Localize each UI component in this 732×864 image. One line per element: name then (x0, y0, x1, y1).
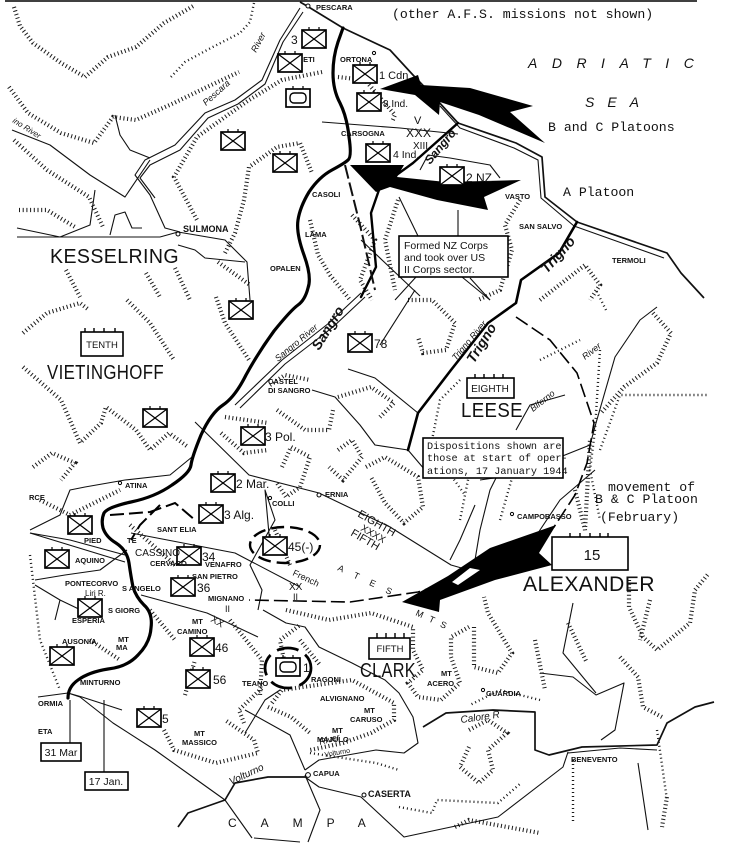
callout: dispositions: those at start of oper- (427, 453, 568, 465)
place names: TERMOLI (612, 256, 646, 265)
place names: GUARDIA (486, 689, 522, 698)
place names: CASOLI (312, 190, 340, 199)
river and mountain range labels: Trigno (537, 233, 578, 276)
unit: 3 Pol: 3 Pol. (265, 430, 296, 444)
corps boundary symbols: XIII (413, 141, 428, 152)
army box: Tenth (81, 328, 123, 356)
unit: 56: 56 (213, 673, 227, 687)
army box: Fifth: FIFTH (377, 644, 404, 655)
place names: SULMONA (183, 224, 229, 234)
place names: AUSONIA (62, 637, 97, 646)
date box: 17 January: 17 Jan. (89, 776, 123, 788)
unit: 2 NZ: 2 NZ (466, 171, 492, 185)
army box: Eighth (467, 374, 514, 398)
river and mountain range labels: Sangro River (273, 321, 320, 364)
callout: New Zealand Corps (399, 236, 508, 277)
place names: SANT ELIA (157, 525, 197, 534)
army group box: 15: 15 (584, 547, 600, 564)
unit: Ausonia (50, 644, 74, 665)
dashed ring: 45 division (250, 527, 320, 563)
river and mountain range labels: Calore R (460, 710, 501, 726)
label: A Platoon: A Platoon (563, 185, 634, 200)
corps boundary symbols: EIGHTH (356, 508, 398, 539)
river and mountain range labels: Trigno River (450, 318, 489, 362)
place names: VENAFRO (205, 560, 242, 569)
river and mountain range labels: ATES (336, 563, 405, 602)
unit: 78 (348, 331, 388, 352)
label: movement of B and C Platoon: (February) (600, 510, 679, 525)
unit: 46 (190, 635, 229, 656)
callout: New Zealand Corps: and took over US (404, 252, 485, 264)
place names: S GIORG (108, 606, 140, 615)
unit: 3 Pol (241, 424, 296, 445)
place names: CASERTA (368, 789, 411, 799)
unit: 2 Mar (211, 471, 269, 492)
date box: 31 March: 31 Mar (45, 747, 78, 759)
place names: MINTURNO (80, 678, 121, 687)
place names: MT (332, 726, 343, 735)
unit: 34: 34 (202, 550, 216, 564)
place names: LAMA (305, 230, 327, 239)
place names: PESCARA (316, 3, 353, 12)
unit: 5: 5 (162, 712, 169, 726)
corps boundary symbols (208, 115, 432, 630)
place names: ORMIA (38, 699, 64, 708)
corps boundary symbols: FIFTH (348, 527, 382, 553)
unit: 46: 46 (215, 641, 229, 655)
big arrow: movement of B and C Platoon (402, 525, 556, 612)
army commander: Kesselring: KESSELRING (50, 246, 179, 268)
river and mountain range labels: ino River (11, 116, 43, 141)
corps boundary symbols: French (291, 568, 321, 589)
river and mountain range labels: Sangro (308, 303, 347, 353)
date box: 31 March (41, 700, 81, 761)
place names: CASSINO (135, 548, 180, 559)
callout: New Zealand Corps: II Corps sector. (404, 264, 475, 276)
unit: 36 (171, 575, 211, 596)
river and mountain range labels: River (580, 340, 604, 362)
river and mountain range labels: Sangro (422, 126, 459, 167)
place names: MA (116, 643, 128, 652)
unit: 2 NZ (440, 164, 492, 185)
place names: VASTO (505, 192, 530, 201)
army group commander: Alexander: ALEXANDER (523, 573, 655, 596)
place names: CAMPOBASSO (517, 512, 572, 521)
place names: MT (364, 706, 375, 715)
label: movement of B and C Platoon: B & C Platoon (595, 492, 698, 507)
corps boundary symbols: XX (289, 582, 303, 593)
unit: centre 2 (273, 151, 297, 172)
place names: MT (441, 669, 452, 678)
place names: CAPUA (313, 769, 340, 778)
Adriatic Sea label (527, 55, 708, 110)
place names: MT (118, 635, 129, 644)
dashed bridgehead line (110, 503, 195, 540)
place names: IETI (301, 55, 315, 64)
unit: 1 armoured (276, 655, 310, 676)
place names: ATINA (125, 481, 148, 490)
unit: 1 Cdn (353, 62, 408, 83)
river and mountain range labels: Trigno (463, 320, 500, 366)
unit: 78: 78 (374, 337, 388, 351)
place names: CAMINO (177, 627, 208, 636)
label: movement of B and C Platoon (595, 480, 698, 525)
place names: BENEVENTO (571, 755, 618, 764)
corps boundary symbols: II (225, 604, 230, 614)
place names: DI SANGRO (268, 386, 311, 395)
place names: MT (192, 617, 203, 626)
river Sangro double line (345, 123, 500, 297)
place names: OPALEN (270, 264, 301, 273)
mission caption: (other A.F.S. missions not shown) (392, 7, 653, 22)
place names: ALVIGNANO (320, 694, 365, 703)
unit: left (68, 513, 92, 534)
place names: CARSOGNA (341, 129, 385, 138)
unit: 36: 36 (197, 581, 211, 595)
corps boundary symbols: II (293, 592, 298, 602)
place names: RCE (29, 493, 45, 502)
dashed ring: 1 armoured (265, 648, 311, 688)
big arrow: B and C Platoons (380, 75, 545, 143)
unit: 8 Ind (357, 90, 408, 111)
army box: Tenth: TENTH (86, 340, 118, 351)
place names: MIGNANO (208, 594, 244, 603)
callout: dispositions: ations, 17 January 1944 (427, 466, 568, 478)
dashed army boundary arc (249, 317, 594, 602)
river and mountain range labels: CAMPA (228, 816, 390, 830)
river and mountain range labels: Volturno (324, 748, 351, 759)
corps boundary lines (30, 122, 490, 637)
river and mountain range labels: Biferno (528, 388, 557, 414)
place names: TEANO (242, 679, 268, 688)
callout: dispositions: Dispositions shown are (427, 441, 562, 453)
place names: MAJULO (317, 735, 349, 744)
Trigno front line (408, 222, 577, 450)
unit: 3 Alg: 3 Alg. (224, 508, 254, 522)
unit: S Giorgio (78, 596, 102, 617)
unit: centre (221, 129, 245, 150)
place names: ERNIA (325, 490, 349, 499)
unit: 56 (186, 667, 227, 688)
place names: SAN PIETRO (192, 572, 238, 581)
front line winter (68, 28, 350, 698)
date box: 17 January (85, 700, 128, 790)
army commander: Clark: CLARK (360, 660, 416, 682)
unit: 1 armoured: 1 (303, 661, 310, 675)
river and mountain range labels: Liri R. (85, 589, 106, 598)
unit: Tenth Army (143, 406, 167, 427)
unit: 3 Alg (199, 502, 254, 523)
unit: armoured (286, 86, 310, 107)
unit: 45 (263, 534, 313, 555)
river and mountain range labels: River (318, 732, 342, 747)
place names: ACERO (427, 679, 454, 688)
corps boundary symbols: XXX (406, 126, 432, 140)
unit: 1 Cdn: 1 Cdn (379, 70, 408, 82)
unit: 8 Ind: 8 Ind. (383, 99, 408, 110)
label: movement of B and C Platoon: movement of (608, 480, 695, 495)
river and mountain range labels: River (249, 30, 268, 54)
place names: MASSICO (182, 738, 217, 747)
river and mountain range labels: Pescara (201, 78, 232, 107)
place names: CARUSO (350, 715, 383, 724)
unit: 3: 3 (291, 33, 298, 47)
place names: ETA (38, 727, 53, 736)
place names: RAGONI (311, 675, 341, 684)
place names: CASTEL (268, 377, 298, 386)
river and mountain range labels: Volturno (228, 762, 266, 788)
place names (29, 3, 646, 799)
corps boundary symbols: XXXX (358, 523, 387, 546)
callout: New Zealand Corps: Formed NZ Corps (404, 240, 488, 252)
place names: COLLI (272, 499, 294, 508)
unit: 3 (291, 27, 326, 48)
Adriatic Sea label: SEA (585, 94, 652, 110)
unit: 2 Mar: 2 Mar. (236, 477, 269, 491)
place names: MT (194, 729, 205, 738)
corps boundary symbols: XX (208, 614, 226, 630)
army commander: Leese: LEESE (461, 400, 523, 422)
unit symbols (45, 27, 492, 727)
river and mountain range labels: MTS (414, 608, 455, 634)
unit: 4 Ind (366, 141, 419, 162)
place names: S ANGELO (122, 584, 161, 593)
army box: Eighth: EIGHTH (471, 384, 509, 395)
unit: upper left (278, 51, 302, 72)
unit: 5 (137, 706, 169, 727)
corps boundary symbols: V (414, 115, 422, 127)
place names: PONTECORVO (65, 579, 118, 588)
place names: PIED (84, 536, 102, 545)
army box: Fifth (369, 633, 410, 659)
Adriatic Sea label: ADRIATIC (527, 55, 708, 71)
unit: 4 Ind: 4 Ind. (393, 149, 419, 161)
unit: 45: 45(-) (288, 540, 313, 554)
big arrow: A Platoon (350, 165, 521, 210)
place names: ESPERIA (72, 616, 106, 625)
place names: AQUINO (75, 556, 105, 565)
place names: TE (127, 536, 137, 545)
place names: SAN SALVO (519, 222, 562, 231)
river and mountain range labels (11, 30, 604, 830)
unit: 34 (177, 544, 216, 565)
top border line (5, 0, 697, 2)
label: B and C Platoons: B and C Platoons (548, 120, 675, 135)
unit: Sangro (229, 298, 253, 319)
place markers (118, 4, 514, 797)
place names: CERVARO (150, 559, 187, 568)
callout: dispositions (423, 438, 568, 478)
place names: ORTONA (340, 55, 373, 64)
army commander: Vietinghoff: VIETINGHOFF (47, 362, 164, 384)
unit: Aquino (45, 547, 69, 568)
army group box: 15 (552, 533, 628, 570)
